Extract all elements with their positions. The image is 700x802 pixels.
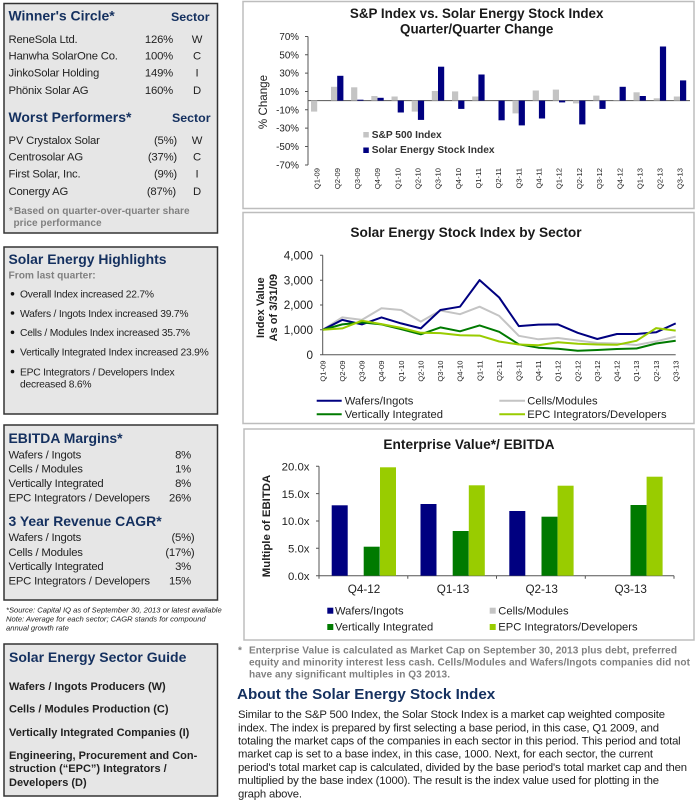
legend: Vertically Integrated <box>345 409 443 421</box>
y axis title: % Change <box>257 75 270 129</box>
table: winners: I <box>196 68 199 80</box>
y axis labels: 3,000 <box>284 274 313 287</box>
y axis labels: 1,000 <box>284 324 313 337</box>
panel: solar energy highlights <box>4 247 218 414</box>
chart title: Enterprise Value*/ EBITDA <box>383 437 555 452</box>
table: EBITDA margins: Vertically Integrated <box>8 478 104 490</box>
x axis labels: Q2-11 <box>494 168 503 189</box>
table: worst performers: C <box>193 152 201 164</box>
text block: about the index: period's total market cap is calculated, divided by the base period's total market cap and then <box>238 762 687 774</box>
x axis labels: Q3-11 <box>514 168 523 189</box>
legend: Wafers/Ingots <box>345 396 414 408</box>
table: winners: W <box>192 34 203 46</box>
x axis labels: Q1-11 <box>475 360 484 381</box>
text block: about the index: Similar to the S&P 500 Index, the Solar Stock Index is a market cap weighted composite <box>238 709 665 721</box>
chart title: S&P Index vs. Solar Energy Stock Index <box>350 6 604 21</box>
x axis labels: Q3-09 <box>358 360 367 382</box>
y axis labels <box>282 462 310 583</box>
y axis labels: -50% <box>276 142 299 153</box>
legend <box>317 396 667 421</box>
table: EBITDA margins: 1% <box>175 464 191 476</box>
line: cells/modules <box>323 307 676 345</box>
table: EBITDA margins <box>8 449 191 504</box>
table: winners: 149% <box>145 68 173 80</box>
line: vertically integrated <box>323 322 676 351</box>
y axis title: Multiple of EBITDA <box>261 475 273 577</box>
y axis labels: 10.0x <box>282 516 310 528</box>
line: EPC integrators/developers <box>323 321 676 345</box>
table: EBITDA margins: 8% <box>175 449 191 461</box>
table: revenue CAGR: Cells / Modules <box>8 547 83 559</box>
table: winners <box>8 34 203 97</box>
chart panel: index by sector <box>243 212 694 424</box>
x axis labels: Q1-13 <box>635 168 644 189</box>
y axis labels: 5.0x <box>288 544 310 556</box>
legend: Vertically Integrated <box>335 622 433 634</box>
x axis labels: Q3-10 <box>434 168 443 189</box>
table: revenue CAGR: (5%) <box>171 532 195 544</box>
enterprise value note: have any significant multiples in Q3 2013. <box>249 670 450 680</box>
chart title: Quarter/Quarter Change <box>400 22 553 36</box>
list: sector definitions: Engineering, Procurement and Con- <box>9 750 198 762</box>
enterprise value note: equity and minority interest less cash. Cells/Modules and Wafers/Ingots companies did not <box>249 658 691 668</box>
bullet list: highlights: Cells / Modules Index increased 35.7% <box>20 328 190 339</box>
y axis labels: 30% <box>279 69 299 80</box>
bullet list: highlights: Vertically Integrated Index increased 23.9% <box>20 348 209 358</box>
text block: about the index: index. The index is prepared by first selecting a base period, in this case, Q1 2009, and <box>238 722 659 734</box>
x axis labels: Q2-12 <box>573 360 582 382</box>
table: winners: ReneSola Ltd. <box>8 34 78 46</box>
note: share price basis: price performance <box>14 218 102 229</box>
panel: winners and worst performers <box>4 4 218 233</box>
table: revenue CAGR: 15% <box>169 576 191 588</box>
note: share price basis: * <box>9 206 13 217</box>
table: revenue CAGR: (17%) <box>165 547 195 559</box>
bars: vertically integrated <box>364 505 646 576</box>
x axis labels: Q2-11 <box>495 360 504 381</box>
x axis labels: Q4-10 <box>456 360 465 382</box>
y axis labels: -10% <box>276 105 299 116</box>
y axis labels: 10% <box>279 87 299 98</box>
text block: about the index: market cap is set to a base index, in this case, 1000. Next, for each sector, the current <box>238 749 654 761</box>
table: EBITDA margins: Wafers / Ingots <box>8 449 82 461</box>
x axis labels: Q1-10 <box>397 360 406 382</box>
table: EBITDA margins: 8% <box>175 478 191 490</box>
x axis labels: Q2-12 <box>575 168 584 189</box>
table: revenue CAGR: EPC Integrators / Developers <box>8 576 150 588</box>
axes <box>320 255 676 355</box>
heading: sector column: Sector <box>171 10 210 24</box>
note: share price basis: Based on quarter-over-quarter share <box>14 206 190 217</box>
bullet list: highlights: Overall Index increased 22.7% <box>20 290 154 300</box>
x axis labels: Q4-12 <box>613 360 622 382</box>
heading: revenue CAGR: 3 Year Revenue CAGR* <box>8 513 162 529</box>
y axis labels <box>276 32 299 172</box>
x axis labels: Q1-12 <box>554 360 563 382</box>
heading: EBITDA margins: EBITDA Margins* <box>8 430 123 446</box>
table: worst performers: (37%) <box>148 152 177 164</box>
x axis labels <box>318 360 680 382</box>
chart title <box>350 6 604 36</box>
list: sector definitions: Wafers / Ingots Producers (W) <box>9 681 166 693</box>
x axis labels: Q4-10 <box>454 168 463 189</box>
enterprise value note <box>238 646 691 680</box>
x axis labels: Q2-10 <box>416 360 426 382</box>
x axis labels: Q3-11 <box>514 360 524 381</box>
x axis labels <box>313 168 685 189</box>
bullet list: highlights: Wafers / Ingots Index increased 39.7% <box>20 309 188 320</box>
line: wafers/ingots <box>323 280 676 339</box>
y axis title <box>255 274 280 341</box>
y axis labels: 0.0x <box>288 571 310 583</box>
x axis labels: Q2-13 <box>656 168 665 189</box>
table: winners: Hanwha SolarOne Co. <box>8 50 118 62</box>
legend <box>327 606 638 634</box>
x axis labels: Q4-09 <box>377 360 386 382</box>
source footnote <box>6 606 222 632</box>
table: winners: JinkoSolar Holding <box>8 68 99 80</box>
y axis labels: -70% <box>276 160 299 172</box>
list: sector definitions: Cells / Modules Production (C) <box>9 704 169 716</box>
table: winners: Phönix Solar AG <box>8 85 88 97</box>
x axis labels: Q3-13 <box>671 360 680 382</box>
table: worst performers: First Solar, Inc. <box>8 168 80 180</box>
legend: S&P 500 Index <box>372 130 442 141</box>
heading: worst performers: Worst Performers* <box>8 109 132 125</box>
x axis labels: Q4-12 <box>348 583 380 596</box>
bars: EPC integrators/developers <box>380 467 663 576</box>
x axis labels: Q3-12 <box>595 168 604 189</box>
text block: about the index: multiplied by the base index (1000). The result is the index value used for plotting in the <box>238 775 659 787</box>
x axis labels: Q3-12 <box>593 360 602 382</box>
subheading: from last quarter: From last quarter: <box>8 270 96 282</box>
note: share price basis <box>9 206 190 229</box>
list: sector definitions: Developers (D) <box>9 777 87 789</box>
table: EBITDA margins: 26% <box>169 492 191 504</box>
bullet list: highlights <box>11 290 209 390</box>
x axis labels: Q2-09 <box>338 360 347 382</box>
x axis labels: Q4-11 <box>535 168 544 189</box>
x axis labels: Q2-10 <box>414 168 423 189</box>
y axis title: Index Value <box>255 277 267 338</box>
x axis labels: Q1-10 <box>393 168 402 189</box>
x axis labels: Q4-09 <box>373 168 382 189</box>
y axis labels: 4,000 <box>284 250 313 262</box>
table: revenue CAGR <box>8 532 195 588</box>
text block: about the index: graph above. <box>238 788 302 800</box>
x axis labels: Q4-11 <box>534 360 543 381</box>
enterprise value note: Enterprise Value is calculated as Market Cap on September 30, 2013 plus debt, preferred <box>249 646 677 656</box>
table: EBITDA margins: Cells / Modules <box>8 464 83 476</box>
table: worst performers: (87%) <box>147 186 176 198</box>
table: worst performers: Conergy AG <box>8 186 68 198</box>
source footnote: *Source: Capital IQ as of September 30, 2013 or latest available <box>6 606 222 614</box>
x axis labels: Q3-10 <box>436 360 445 382</box>
x axis labels: Q2-09 <box>333 168 342 189</box>
x axis labels: Q3-09 <box>353 168 362 189</box>
bullet list: highlights: EPC Integrators / Developers Index <box>20 368 176 378</box>
axes <box>305 36 690 165</box>
list: sector definitions <box>9 681 198 789</box>
y axis labels <box>284 250 313 362</box>
table: worst performers <box>8 135 203 198</box>
table: worst performers: Centrosolar AG <box>8 152 83 164</box>
x axis labels: Q3-13 <box>676 168 685 189</box>
table: revenue CAGR: Vertically Integrated <box>8 561 104 573</box>
bars: solar index <box>337 46 686 125</box>
x axis labels: Q2-13 <box>525 583 558 596</box>
table: winners: 126% <box>145 34 173 46</box>
panel: margins and CAGR <box>4 425 218 600</box>
heading: winner's circle: Winner's Circle* <box>8 8 115 24</box>
legend: Cells/Modules <box>527 396 598 408</box>
legend: Cells/Modules <box>498 606 569 618</box>
table: worst performers: (5%) <box>154 135 177 147</box>
legend: Wafers/Ingots <box>335 606 404 618</box>
source footnote: annual growth rate <box>6 624 69 632</box>
y axis labels: 50% <box>279 50 299 61</box>
heading: highlights: Solar Energy Highlights <box>8 251 167 267</box>
text block: about the index <box>238 709 687 800</box>
table: worst performers: W <box>192 135 203 147</box>
table: winners: D <box>193 85 201 97</box>
source footnote: Note: Average for each sector; CAGR stands for compound <box>6 614 206 624</box>
chart panel: S&P vs solar index <box>243 2 694 208</box>
table: winners: C <box>193 50 201 62</box>
panel: sector guide <box>4 644 218 796</box>
x axis labels: Q4-12 <box>615 168 624 189</box>
list: sector definitions: Vertically Integrated Companies (I) <box>9 727 190 739</box>
x axis labels: Q1-13 <box>437 583 469 596</box>
table: revenue CAGR: Wafers / Ingots <box>8 532 82 544</box>
bars: S&P 500 <box>311 87 680 113</box>
table: worst performers: I <box>196 168 199 180</box>
table: worst performers: D <box>193 186 201 198</box>
y axis labels: 20.0x <box>282 462 310 474</box>
bars: wafers/ingots <box>332 504 525 576</box>
heading: sector guide: Solar Energy Sector Guide <box>9 649 187 665</box>
enterprise value note: * <box>238 646 242 656</box>
heading: sector column 2: Sector <box>172 111 211 125</box>
axes <box>316 466 674 579</box>
table: winners: 100% <box>145 50 173 62</box>
text block: about the index: totaling the market caps of the companies in each sector in this period. This period and total <box>238 736 681 748</box>
legend: Solar Energy Stock Index <box>372 145 495 156</box>
x axis labels <box>348 583 647 596</box>
y axis labels: 0 <box>306 349 313 362</box>
chart title: Solar Energy Stock Index by Sector <box>350 225 582 240</box>
x axis labels: Q1-11 <box>474 168 483 189</box>
table: EBITDA margins: EPC Integrators / Developers <box>8 492 150 504</box>
table: worst performers: (9%) <box>154 168 177 180</box>
x axis labels: Q2-13 <box>652 360 661 382</box>
table: winners: 160% <box>145 85 173 97</box>
x axis labels: Q3-13 <box>614 583 647 596</box>
list: sector definitions: struction (“EPC”) Integrators / <box>9 763 167 775</box>
legend <box>363 130 495 156</box>
table: worst performers: PV Crystalox Solar <box>8 135 100 147</box>
x axis labels: Q1-12 <box>555 168 564 189</box>
x axis labels: Q1-09 <box>318 360 327 382</box>
legend: EPC Integrators/Developers <box>527 409 667 421</box>
y axis labels: 2,000 <box>284 299 313 312</box>
legend: EPC Integrators/Developers <box>498 622 638 634</box>
heading: about the index: About the Solar Energy Stock Index <box>237 686 496 703</box>
y axis labels: -30% <box>276 124 299 135</box>
y axis labels: 70% <box>279 32 299 43</box>
chart panel: enterprise value / EBITDA <box>244 429 694 640</box>
y axis title: As of 3/31/09 <box>268 274 280 341</box>
y axis labels: 15.0x <box>282 489 310 501</box>
table: revenue CAGR: 3% <box>175 561 191 573</box>
x axis labels: Q1-13 <box>632 360 641 382</box>
bullet list: highlights: decreased 8.6% <box>20 380 91 390</box>
x axis labels: Q1-09 <box>313 168 322 189</box>
